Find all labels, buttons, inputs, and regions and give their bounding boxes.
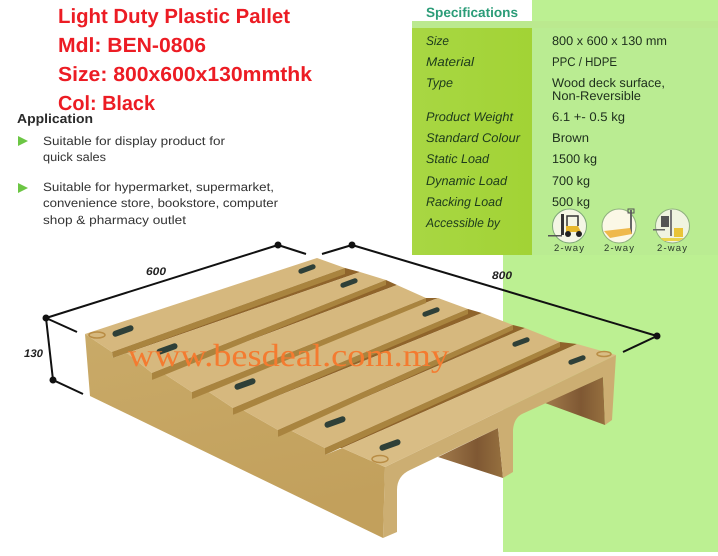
spec values: Brown	[552, 131, 589, 145]
spec labels: Standard Colour	[426, 131, 521, 145]
watermark: www.besdeal.com.my	[128, 337, 449, 373]
title: Mdl: BEN-0806	[58, 34, 206, 57]
application heading: Application	[17, 111, 93, 126]
back legs and underside	[545, 377, 605, 425]
way labels	[554, 243, 687, 254]
application text block	[17, 111, 278, 227]
title: Light Duty Plastic Pallet	[58, 5, 290, 28]
deck slats	[85, 258, 616, 467]
application items: Suitable for display product for	[43, 134, 225, 148]
spec labels: Product Weight	[426, 110, 514, 124]
spec values: 6.1 +- 0.5 kg	[552, 110, 625, 124]
slat side shading	[112, 268, 560, 455]
spec values	[552, 34, 667, 209]
front face	[85, 334, 385, 538]
spec labels: Racking Load	[426, 195, 503, 209]
slots	[112, 264, 586, 452]
title: Col: Black	[58, 92, 156, 115]
icon: stacker	[653, 209, 690, 243]
dimension labels	[24, 266, 513, 360]
way labels: 2-way	[604, 243, 634, 254]
title	[58, 5, 313, 115]
spec values: 500 kg	[552, 195, 590, 209]
way labels: 2-way	[554, 243, 584, 254]
spec labels: Dynamic Load	[426, 174, 508, 188]
application items: convenience store, bookstore, computer	[43, 196, 278, 210]
corner rings	[89, 332, 611, 462]
spec values: 700 kg	[552, 174, 590, 188]
panel: specifications	[412, 5, 718, 255]
application items: shop & pharmacy outlet	[43, 213, 187, 227]
specifications heading: Specifications	[426, 5, 518, 20]
spec values: 1500 kg	[552, 152, 597, 166]
spec labels: Static Load	[426, 152, 490, 166]
right side face	[383, 355, 616, 538]
spec labels	[425, 34, 521, 230]
icon: pallet jack	[602, 209, 636, 243]
application items: Suitable for hypermarket, supermarket,	[43, 180, 274, 194]
dimension labels: 130	[24, 348, 44, 360]
dimension labels: 600	[146, 266, 167, 278]
way labels: 2-way	[657, 243, 687, 254]
spec labels: Material	[426, 55, 475, 69]
dimension labels: 800	[492, 270, 513, 282]
grooves	[112, 268, 577, 448]
spec values: Wood deck surface,	[552, 76, 665, 90]
spec labels: Accessible by	[425, 216, 501, 230]
dimension lines	[42, 242, 660, 394]
spec values: PPC / HDPE	[552, 55, 617, 69]
green background	[503, 0, 718, 552]
spec labels: Size	[426, 34, 449, 48]
application items: quick sales	[43, 150, 106, 164]
spec values: Non-Reversible	[552, 89, 641, 103]
icon: green bullets	[18, 136, 28, 193]
application items	[43, 134, 278, 227]
spec values: 800 x 600 x 130 mm	[552, 34, 667, 48]
spec labels: Type	[426, 76, 453, 90]
icon: forklift	[548, 209, 586, 243]
title: Size: 800x600x130mmthk	[58, 63, 313, 86]
pallet illustration	[85, 258, 616, 538]
